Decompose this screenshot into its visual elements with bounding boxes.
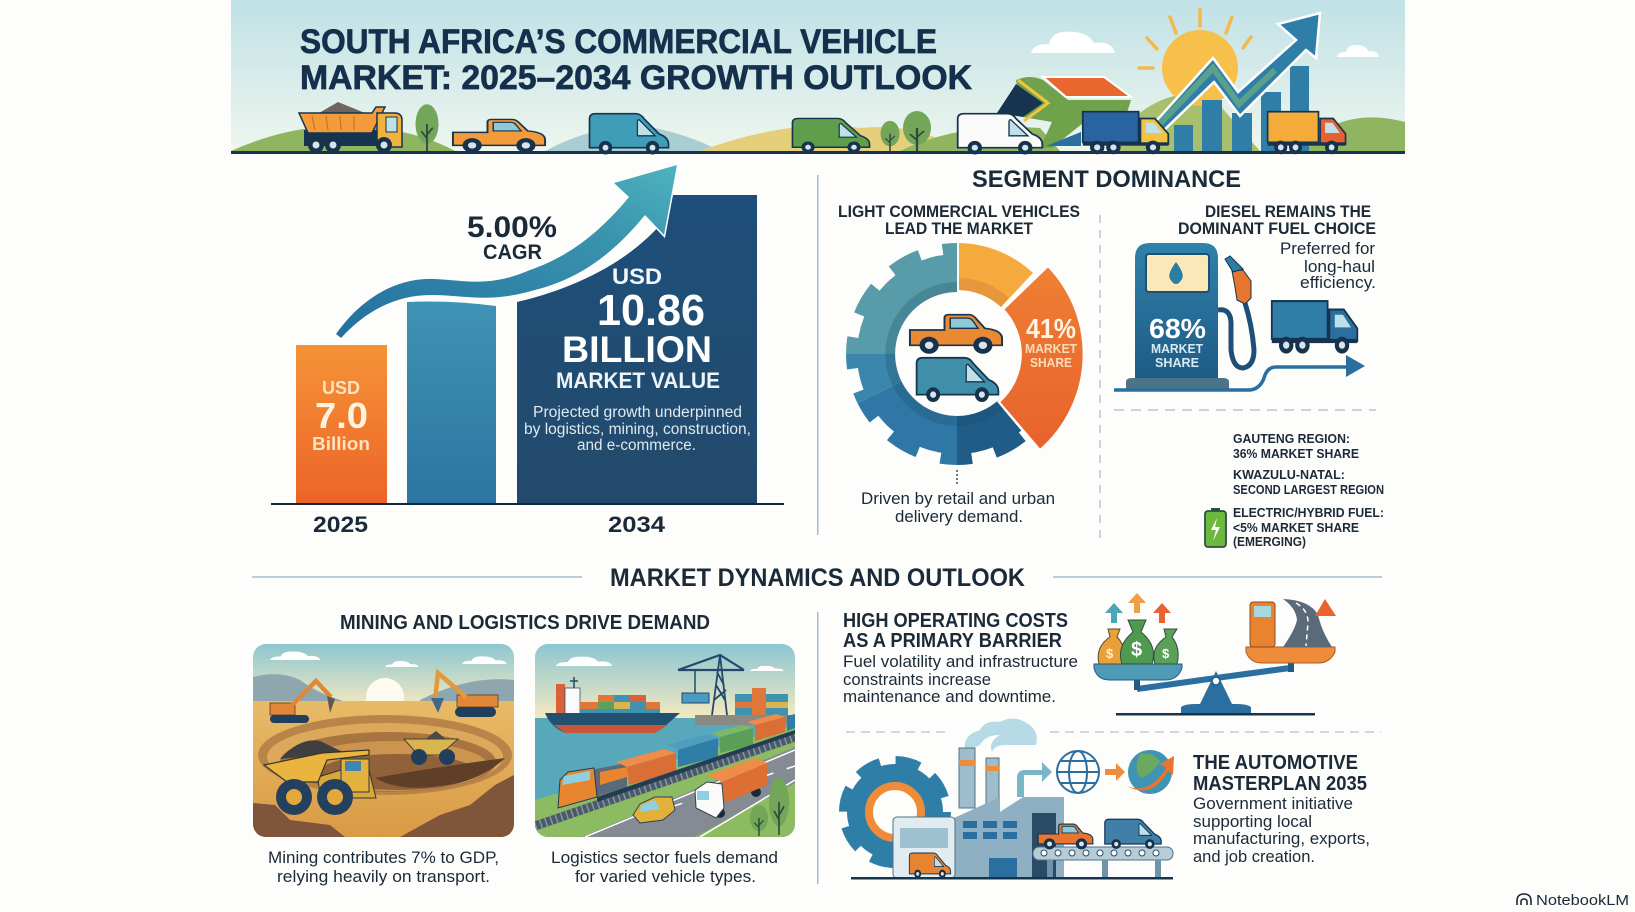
diesel heading: DIESEL REMAINS THE <box>1205 202 1371 221</box>
body text <box>1193 795 1370 866</box>
lcv share value <box>1025 313 1077 370</box>
delivery car <box>633 797 675 823</box>
pump share value: MARKET <box>1151 342 1203 356</box>
growth curve arrow <box>336 165 677 338</box>
year labels: 2034 <box>608 512 666 537</box>
panel: automotive masterplan <box>845 718 1370 880</box>
port crane <box>678 655 744 715</box>
logistics caption <box>551 848 778 886</box>
green van <box>792 118 870 153</box>
factory gear <box>845 762 945 862</box>
notebooklm watermark: NotebookLM <box>1536 892 1629 909</box>
regional stats: 36% MARKET SHARE <box>1233 446 1359 461</box>
excavator right <box>431 673 498 717</box>
regional stats: GAUTENG REGION: <box>1233 431 1350 446</box>
body text: constraints increase <box>843 671 991 689</box>
smoke <box>965 718 1037 752</box>
cargo ship <box>545 677 680 733</box>
2034 description <box>524 404 751 454</box>
orange car on conveyor <box>1038 824 1093 849</box>
heading <box>843 610 1068 652</box>
2034 description: and e-commerce. <box>577 437 696 454</box>
diesel heading: DOMINANT FUEL CHOICE <box>1178 219 1376 238</box>
mining caption: Mining contributes 7% to GDP, <box>268 848 499 867</box>
body text: manufacturing, exports, <box>1193 830 1370 848</box>
pump share value: 68% <box>1149 313 1206 344</box>
regional stats: (EMERGING) <box>1233 534 1306 549</box>
cagr label: CAGR <box>483 241 542 264</box>
heading: SEGMENT DOMINANCE <box>972 166 1241 193</box>
heading: MASTERPLAN 2035 <box>1193 773 1367 795</box>
icon: money bags: $ <box>1162 646 1170 661</box>
fuel pump icon <box>1126 243 1254 390</box>
white van <box>958 114 1042 154</box>
heading: HIGH OPERATING COSTS <box>843 610 1068 632</box>
2034 value: BILLION <box>562 329 712 370</box>
orange truck <box>1268 112 1346 154</box>
2025 value: 7.0 <box>315 395 368 436</box>
title <box>300 23 972 97</box>
icon: fuel pump and road <box>1250 599 1336 647</box>
teal van <box>590 114 668 154</box>
lcv heading: LIGHT COMMERCIAL VEHICLES <box>838 202 1080 221</box>
heading: MINING AND LOGISTICS DRIVE DEMAND <box>340 612 710 634</box>
icon: balance scale <box>1094 593 1336 716</box>
vehicles <box>299 102 1346 154</box>
logistics caption: Logistics sector fuels demand <box>551 848 778 867</box>
title: SOUTH AFRICA’S COMMERCIAL VEHICLE <box>300 23 937 61</box>
year labels <box>313 512 666 537</box>
lcv share value: 41% <box>1026 313 1076 344</box>
illustration: logistics <box>535 644 795 837</box>
truck icon <box>1272 301 1357 354</box>
body text: and job creation. <box>1193 848 1315 866</box>
panel: mining and logistics <box>253 612 795 886</box>
cagr label: 5.00% <box>467 211 557 244</box>
heading: THE AUTOMOTIVE <box>1193 752 1358 774</box>
excavator left <box>270 681 335 723</box>
lcv note: Driven by retail and urban <box>861 490 1055 508</box>
large dump truck <box>264 740 376 815</box>
baseline <box>271 503 784 505</box>
lcv share value: SHARE <box>1030 356 1072 370</box>
blue van on conveyor <box>1105 819 1161 849</box>
delivery truck <box>695 758 767 818</box>
lcv heading <box>838 202 1080 238</box>
banner bar chart <box>1174 66 1309 152</box>
bar middle <box>407 302 496 503</box>
regional stats: ELECTRIC/HYBRID FUEL: <box>1233 505 1384 520</box>
icon: battery <box>1205 508 1226 547</box>
orange connector <box>1105 763 1125 781</box>
dump truck <box>299 102 402 153</box>
conveyor <box>1033 847 1173 878</box>
icon: money bags: $ <box>1106 646 1114 661</box>
sun <box>1139 9 1251 106</box>
banner <box>231 0 1405 154</box>
body text: Government initiative <box>1193 795 1353 813</box>
banner hills <box>231 94 1405 151</box>
title: MARKET: 2025–2034 GROWTH OUTLOOK <box>300 59 972 97</box>
regional stats: SECOND LARGEST REGION <box>1233 482 1384 497</box>
roadside trees <box>750 778 789 836</box>
icon: factory <box>845 718 1174 880</box>
diesel heading <box>1178 202 1376 238</box>
regional stats: <5% MARKET SHARE <box>1233 520 1359 535</box>
growth arrow <box>1150 13 1320 134</box>
2034 value: 10.86 <box>597 286 705 335</box>
diesel note: efficiency. <box>1300 274 1376 292</box>
globe <box>1057 751 1099 793</box>
lcv note <box>861 490 1055 526</box>
lcv heading: LEAD THE MARKET <box>885 219 1034 238</box>
fuel arrow <box>1114 355 1365 390</box>
heading: AS A PRIMARY BARRIER <box>843 630 1063 652</box>
body text: Fuel volatility and infrastructure <box>843 653 1078 671</box>
diesel note <box>1280 240 1376 292</box>
icon: money bags: $ <box>1131 639 1142 661</box>
2034 description: by logistics, mining, construction, <box>524 421 751 438</box>
orange pickup <box>453 119 545 153</box>
icon: up arrows <box>1105 593 1171 623</box>
orange van in factory <box>909 853 951 878</box>
section heading: market dynamics: MARKET DYNAMICS AND OUTLOOK <box>610 564 1025 592</box>
diesel note: Preferred for <box>1280 240 1376 258</box>
heading <box>1193 752 1367 795</box>
year labels: 2025 <box>313 512 368 537</box>
panel: operating costs <box>843 593 1336 716</box>
diesel note: long-haul <box>1304 258 1375 276</box>
logistics caption: for varied vehicle types. <box>575 867 756 886</box>
illustration: mining <box>253 644 514 837</box>
blue truck <box>1083 112 1168 154</box>
freight train <box>558 714 795 808</box>
cagr label <box>467 211 557 264</box>
mining caption: relying heavily on transport. <box>277 867 490 886</box>
pump share value: SHARE <box>1155 356 1199 370</box>
pump share value <box>1149 313 1206 370</box>
body text: maintenance and downtime. <box>843 688 1056 706</box>
export arrow <box>1017 762 1052 797</box>
bar 2025 <box>296 345 387 503</box>
gear donut chart <box>854 243 1084 457</box>
banner clouds <box>1031 32 1379 57</box>
2025 value: USD <box>322 378 360 398</box>
2034 value: MARKET VALUE <box>556 368 720 393</box>
2034 description: Projected growth underpinned <box>533 404 742 421</box>
2034 value: USD <box>612 264 662 289</box>
panel: market growth chart <box>271 165 784 537</box>
container stack <box>695 688 795 725</box>
body text <box>843 653 1078 706</box>
body text: supporting local <box>1193 813 1312 831</box>
van icon <box>917 358 998 402</box>
2025 value <box>312 378 370 454</box>
panel: segment dominance <box>838 166 1384 549</box>
lcv share value: MARKET <box>1025 342 1077 356</box>
icon: money bags <box>1098 620 1178 664</box>
regional stats <box>1233 431 1384 549</box>
lcv note: delivery demand. <box>895 508 1023 526</box>
2034 value <box>556 264 720 393</box>
2025 value: Billion <box>312 434 370 454</box>
south african flag <box>997 77 1131 148</box>
bar 2034 <box>517 195 757 503</box>
pickup icon <box>910 315 1002 354</box>
small dump truck <box>404 731 458 765</box>
earth <box>1127 750 1174 794</box>
regional stats: KWAZULU-NATAL: <box>1233 467 1345 482</box>
mining caption <box>268 848 499 886</box>
